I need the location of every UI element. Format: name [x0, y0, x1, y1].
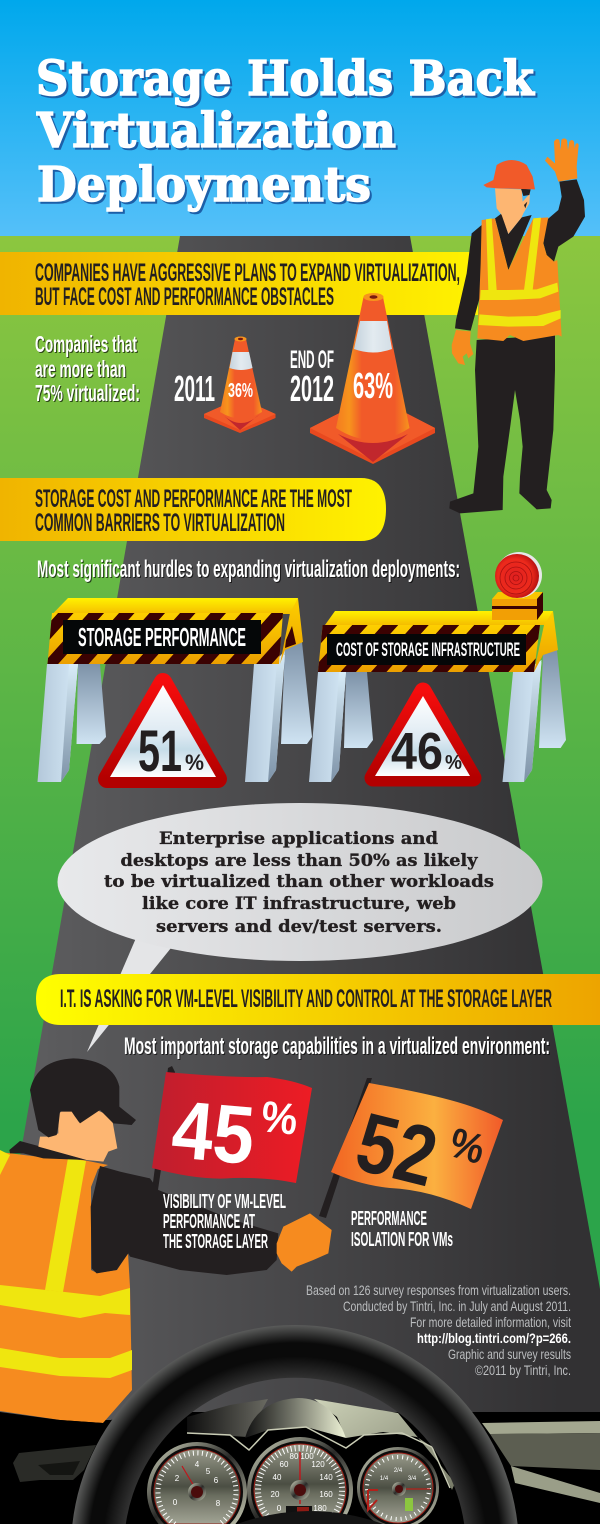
gauge: speedometer: 0 [277, 1504, 282, 1513]
text: companies more than 75% virtualized: 75% virtualized: [35, 380, 140, 406]
label: visibility of VM-level performance: VISIBILITY OF VM-LEVEL [163, 1191, 286, 1213]
gauge: tachometer: 0 [173, 1498, 178, 1507]
gauge: tachometer: 2 [175, 1474, 180, 1483]
gauge: speedometer: 20 [271, 1490, 280, 1499]
banner: VM-level visibility [36, 974, 600, 1025]
illustration: flagman head and arm [9, 1058, 332, 1275]
text: survey source note [306, 1282, 571, 1378]
banner: aggressive plans [0, 252, 478, 315]
label: performance isolation: PERFORMANCE [351, 1208, 427, 1230]
gauge: speedometer [247, 1437, 353, 1524]
gauge: fuel and temperature: 3/4 [408, 1476, 417, 1482]
title: Storage Holds Back [36, 51, 536, 107]
banner: barriers to virtualization [0, 478, 386, 541]
label: end of 2012 [290, 346, 334, 409]
gauge: speedometer: 160 [319, 1490, 333, 1499]
gauge: speedometer: 60 [280, 1460, 289, 1469]
barricade: cost of storage infrastructure [309, 611, 566, 782]
sign: 46% warning triangle: % [445, 752, 462, 774]
gauge: fuel and temperature: 2/4 [394, 1468, 403, 1474]
illustration: waving road worker [449, 138, 585, 513]
flag: 45%: 45 [168, 1084, 258, 1182]
callout: speech bubble: to be virtualized than other workloads [104, 872, 494, 892]
label: performance isolation: ISOLATION FOR VMs [351, 1229, 453, 1251]
steering wheel hub [237, 1511, 383, 1524]
barricade: storage performance: STORAGE PERFORMANCE [78, 622, 246, 652]
gauge: speedometer: 100 [300, 1452, 314, 1461]
icon: large traffic cone 63% [310, 293, 435, 464]
sky background [0, 0, 600, 237]
title [36, 51, 536, 213]
text: survey source note: ©2011 by Tintri, Inc. [475, 1362, 571, 1378]
car interior: instrument hood [187, 1398, 455, 1490]
sign: 51% warning triangle: 51 [138, 719, 182, 784]
sign: 51% warning triangle: % [185, 750, 204, 775]
icon: small traffic cone 36%: 36% [228, 380, 253, 402]
icon: warning lamp [492, 552, 543, 620]
grass lower background [0, 1125, 600, 1420]
label: 2011: 2011 [174, 368, 215, 409]
gauge: tachometer: 5 [206, 1467, 211, 1476]
banner: barriers to virtualization: COMMON BARRIERS TO VIRTUALIZATION [35, 509, 285, 537]
steering wheel rim [72, 1325, 518, 1524]
barricade: storage performance [38, 598, 312, 782]
callout: speech bubble: desktops are less than 50% as likely [120, 851, 479, 871]
icon: small traffic cone 36% [204, 336, 276, 433]
gauge: speedometer: 140 [319, 1473, 333, 1482]
gauge: tachometer: 8 [216, 1499, 221, 1508]
callout: speech bubble [58, 803, 542, 1052]
label: end of 2012: 2012 [290, 368, 334, 409]
text: companies more than 75% virtualized: are more than [35, 356, 126, 382]
flag: 52%: 52 [348, 1094, 446, 1204]
sign: 46% warning triangle: 46 [391, 723, 443, 781]
flag: 45%: % [259, 1092, 300, 1145]
gauge: speedometer: 40 [273, 1473, 282, 1482]
road [0, 236, 600, 1420]
label: performance isolation [351, 1208, 453, 1251]
text: companies more than 75% virtualized: Companies that [35, 331, 137, 357]
illustration: flagman vest [0, 1150, 132, 1423]
label: visibility of VM-level performance: PERFORMANCE AT [163, 1211, 255, 1233]
gauge: speedometer: 120 [311, 1460, 325, 1469]
gauge: speedometer: 80 [290, 1452, 299, 1461]
icon: large traffic cone 63%: 63% [353, 365, 393, 406]
callout: speech bubble: servers and dev/test servers. [156, 917, 442, 937]
text: END OF [290, 346, 334, 374]
title: Deployments [37, 157, 371, 213]
grass background [0, 236, 600, 1126]
gauge: tachometer: 4 [195, 1460, 200, 1469]
callout: speech bubble: Enterprise applications and [159, 829, 438, 849]
label: visibility of VM-level performance [163, 1191, 286, 1253]
flag: 52% [319, 1078, 503, 1218]
sign: 51% warning triangle [107, 682, 218, 784]
gauge: tachometer: 6 [214, 1476, 219, 1485]
text: companies more than 75% virtualized [35, 331, 140, 406]
label: visibility of VM-level performance: THE STORAGE LAYER [163, 1231, 268, 1253]
flag: 52%: % [445, 1118, 490, 1173]
gauge: fuel and temperature [357, 1447, 439, 1524]
gauge: speedometer: 180 [313, 1504, 327, 1513]
sign: 46% warning triangle [373, 691, 473, 781]
gauge: tachometer [147, 1442, 247, 1524]
callout: speech bubble: like core IT infrastructure, web [142, 894, 456, 914]
title: Virtualization [36, 103, 396, 159]
flag: 45% [152, 1066, 312, 1190]
car interior: dashboard below windshield [0, 1412, 600, 1524]
gauge: fuel and temperature: 1/4 [380, 1476, 389, 1482]
